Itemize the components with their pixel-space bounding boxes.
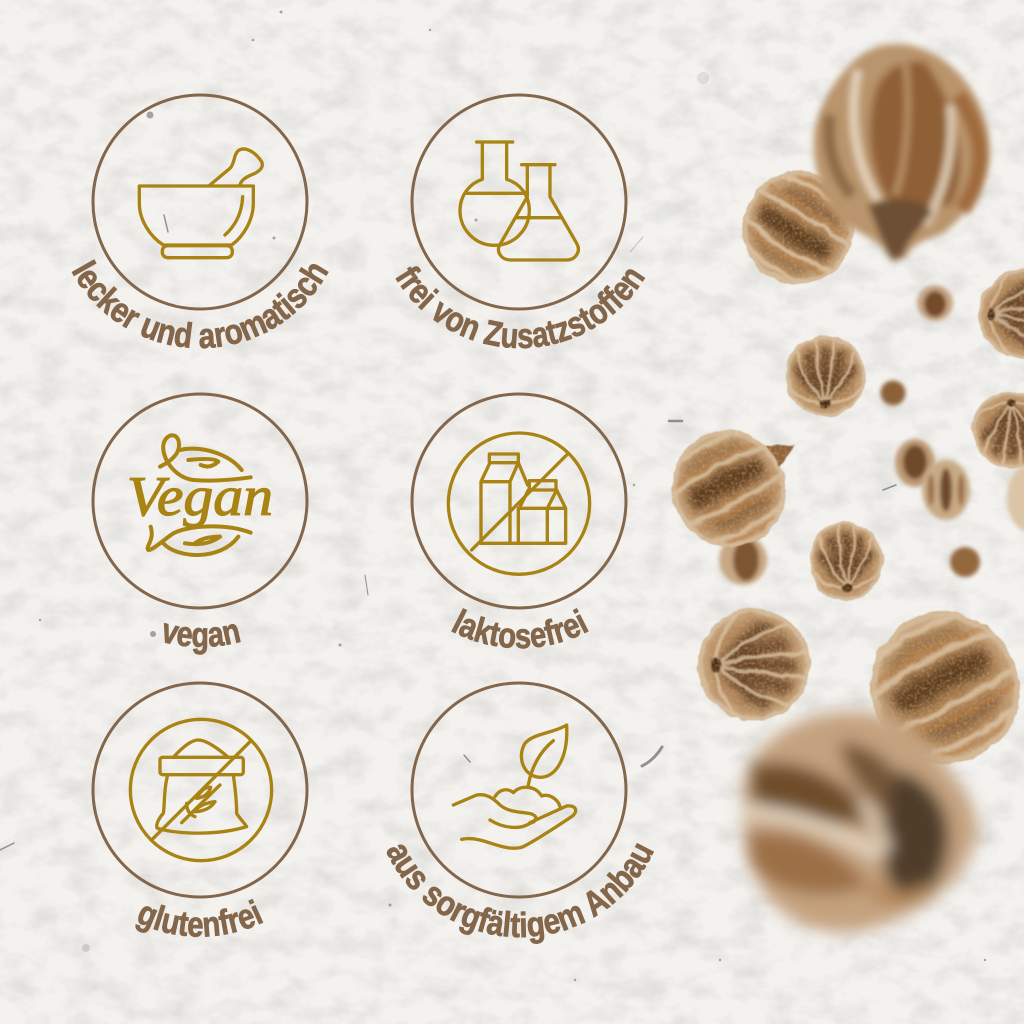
seed: large blurred top — [814, 44, 990, 262]
seed: blurred mid — [895, 439, 935, 487]
feature: aus sorgfaeltigem Anbau — [386, 682, 654, 944]
seed: tiny blurred — [880, 380, 906, 406]
ring — [412, 683, 626, 897]
seed: tilted with tip — [652, 411, 806, 567]
seed: large blurred bottom — [742, 712, 977, 932]
icon: hand with seedling — [453, 725, 576, 848]
feature: glutenfrei — [92, 682, 308, 938]
ring — [412, 95, 626, 309]
label: frei von Zusatzstoffen — [395, 266, 646, 349]
icon: crossed milk cartons — [448, 433, 590, 574]
ring — [412, 394, 626, 608]
label: laktosefrei — [451, 608, 589, 649]
seed: pole view center — [809, 522, 883, 600]
label: glutenfrei — [135, 898, 264, 938]
feature: vegan — [92, 392, 308, 695]
seed: large lower right — [844, 586, 1024, 790]
icon: flasks — [460, 142, 578, 260]
seed — [721, 151, 875, 305]
seed — [922, 460, 970, 520]
ring — [93, 683, 307, 897]
seed: small blurred — [917, 285, 953, 321]
seed: right edge mid — [973, 391, 1024, 469]
seed: right edge — [978, 270, 1024, 358]
label: aus sorgfältigem Anbau — [386, 842, 654, 944]
seed: pole view — [785, 336, 865, 416]
coriander seeds — [652, 44, 1024, 932]
seed: behind — [719, 535, 767, 585]
script word: Vegan — [127, 466, 273, 528]
icon: crossed flour bag — [130, 719, 272, 861]
feature: laktosefrei — [410, 392, 628, 649]
ring — [93, 95, 307, 309]
feature: lecker und aromatisch — [72, 94, 329, 396]
feature: frei von Zusatzstoffen — [395, 94, 646, 349]
seed: tiny blurred lower — [950, 547, 980, 577]
label: lecker und aromatisch — [72, 259, 329, 349]
ring — [93, 394, 307, 608]
label: vegan — [164, 622, 241, 655]
icon: mortar and pestle — [139, 149, 262, 258]
seed: round lower left — [698, 609, 810, 721]
leaf flourishes — [148, 435, 251, 555]
seed: right edge low — [1007, 465, 1024, 531]
icon: vegan lettering with leaves — [127, 435, 273, 555]
